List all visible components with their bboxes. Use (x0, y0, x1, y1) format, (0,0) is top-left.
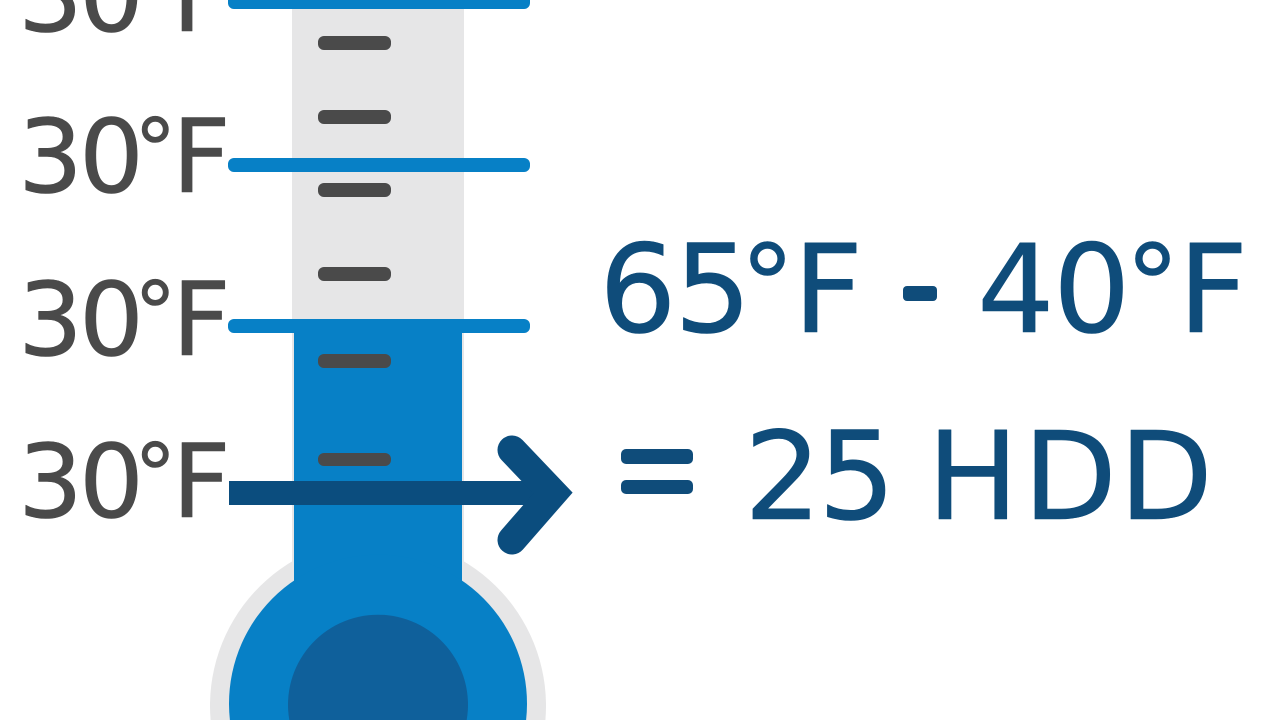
scale line middle (228, 158, 530, 172)
formula line 2: 25 (744, 406, 896, 548)
label: 30F third: F (172, 261, 231, 380)
formula (599, 219, 1248, 548)
arrow pointing to formula (229, 450, 553, 540)
scale line top (228, 0, 530, 9)
mercury column (294, 320, 462, 620)
formula line 1: 65 (599, 219, 752, 361)
label: 30F third: 30 (18, 261, 144, 380)
label: 30F fourth: F (172, 423, 231, 542)
formula line 1 (599, 219, 1248, 361)
mercury bulb (229, 555, 527, 720)
temperature labels (18, 0, 231, 542)
thermometer bulb outer casing (210, 538, 546, 720)
scale line lower (228, 319, 530, 333)
thermometer glass tube (292, 0, 464, 600)
label: 30F third: ° (134, 264, 176, 363)
label: 30F second: 30 (18, 98, 144, 217)
formula line 1: 40 (977, 219, 1131, 361)
formula line 1: F (793, 219, 863, 361)
formula line 1: F (1178, 219, 1248, 361)
thermometer (210, 0, 546, 720)
label: 30F fourth: ° (134, 426, 176, 525)
label: 30F second: F (172, 98, 231, 217)
formula line 1: ° (1125, 221, 1180, 349)
label: 30F second: ° (134, 101, 176, 200)
inner bulb highlight (288, 615, 468, 720)
label: 30F fourth: 30 (18, 423, 144, 542)
formula line 1: ° (740, 221, 795, 349)
formula line 2 (621, 406, 1213, 548)
formula line 2: HDD (927, 406, 1213, 548)
tick marks (318, 36, 391, 466)
